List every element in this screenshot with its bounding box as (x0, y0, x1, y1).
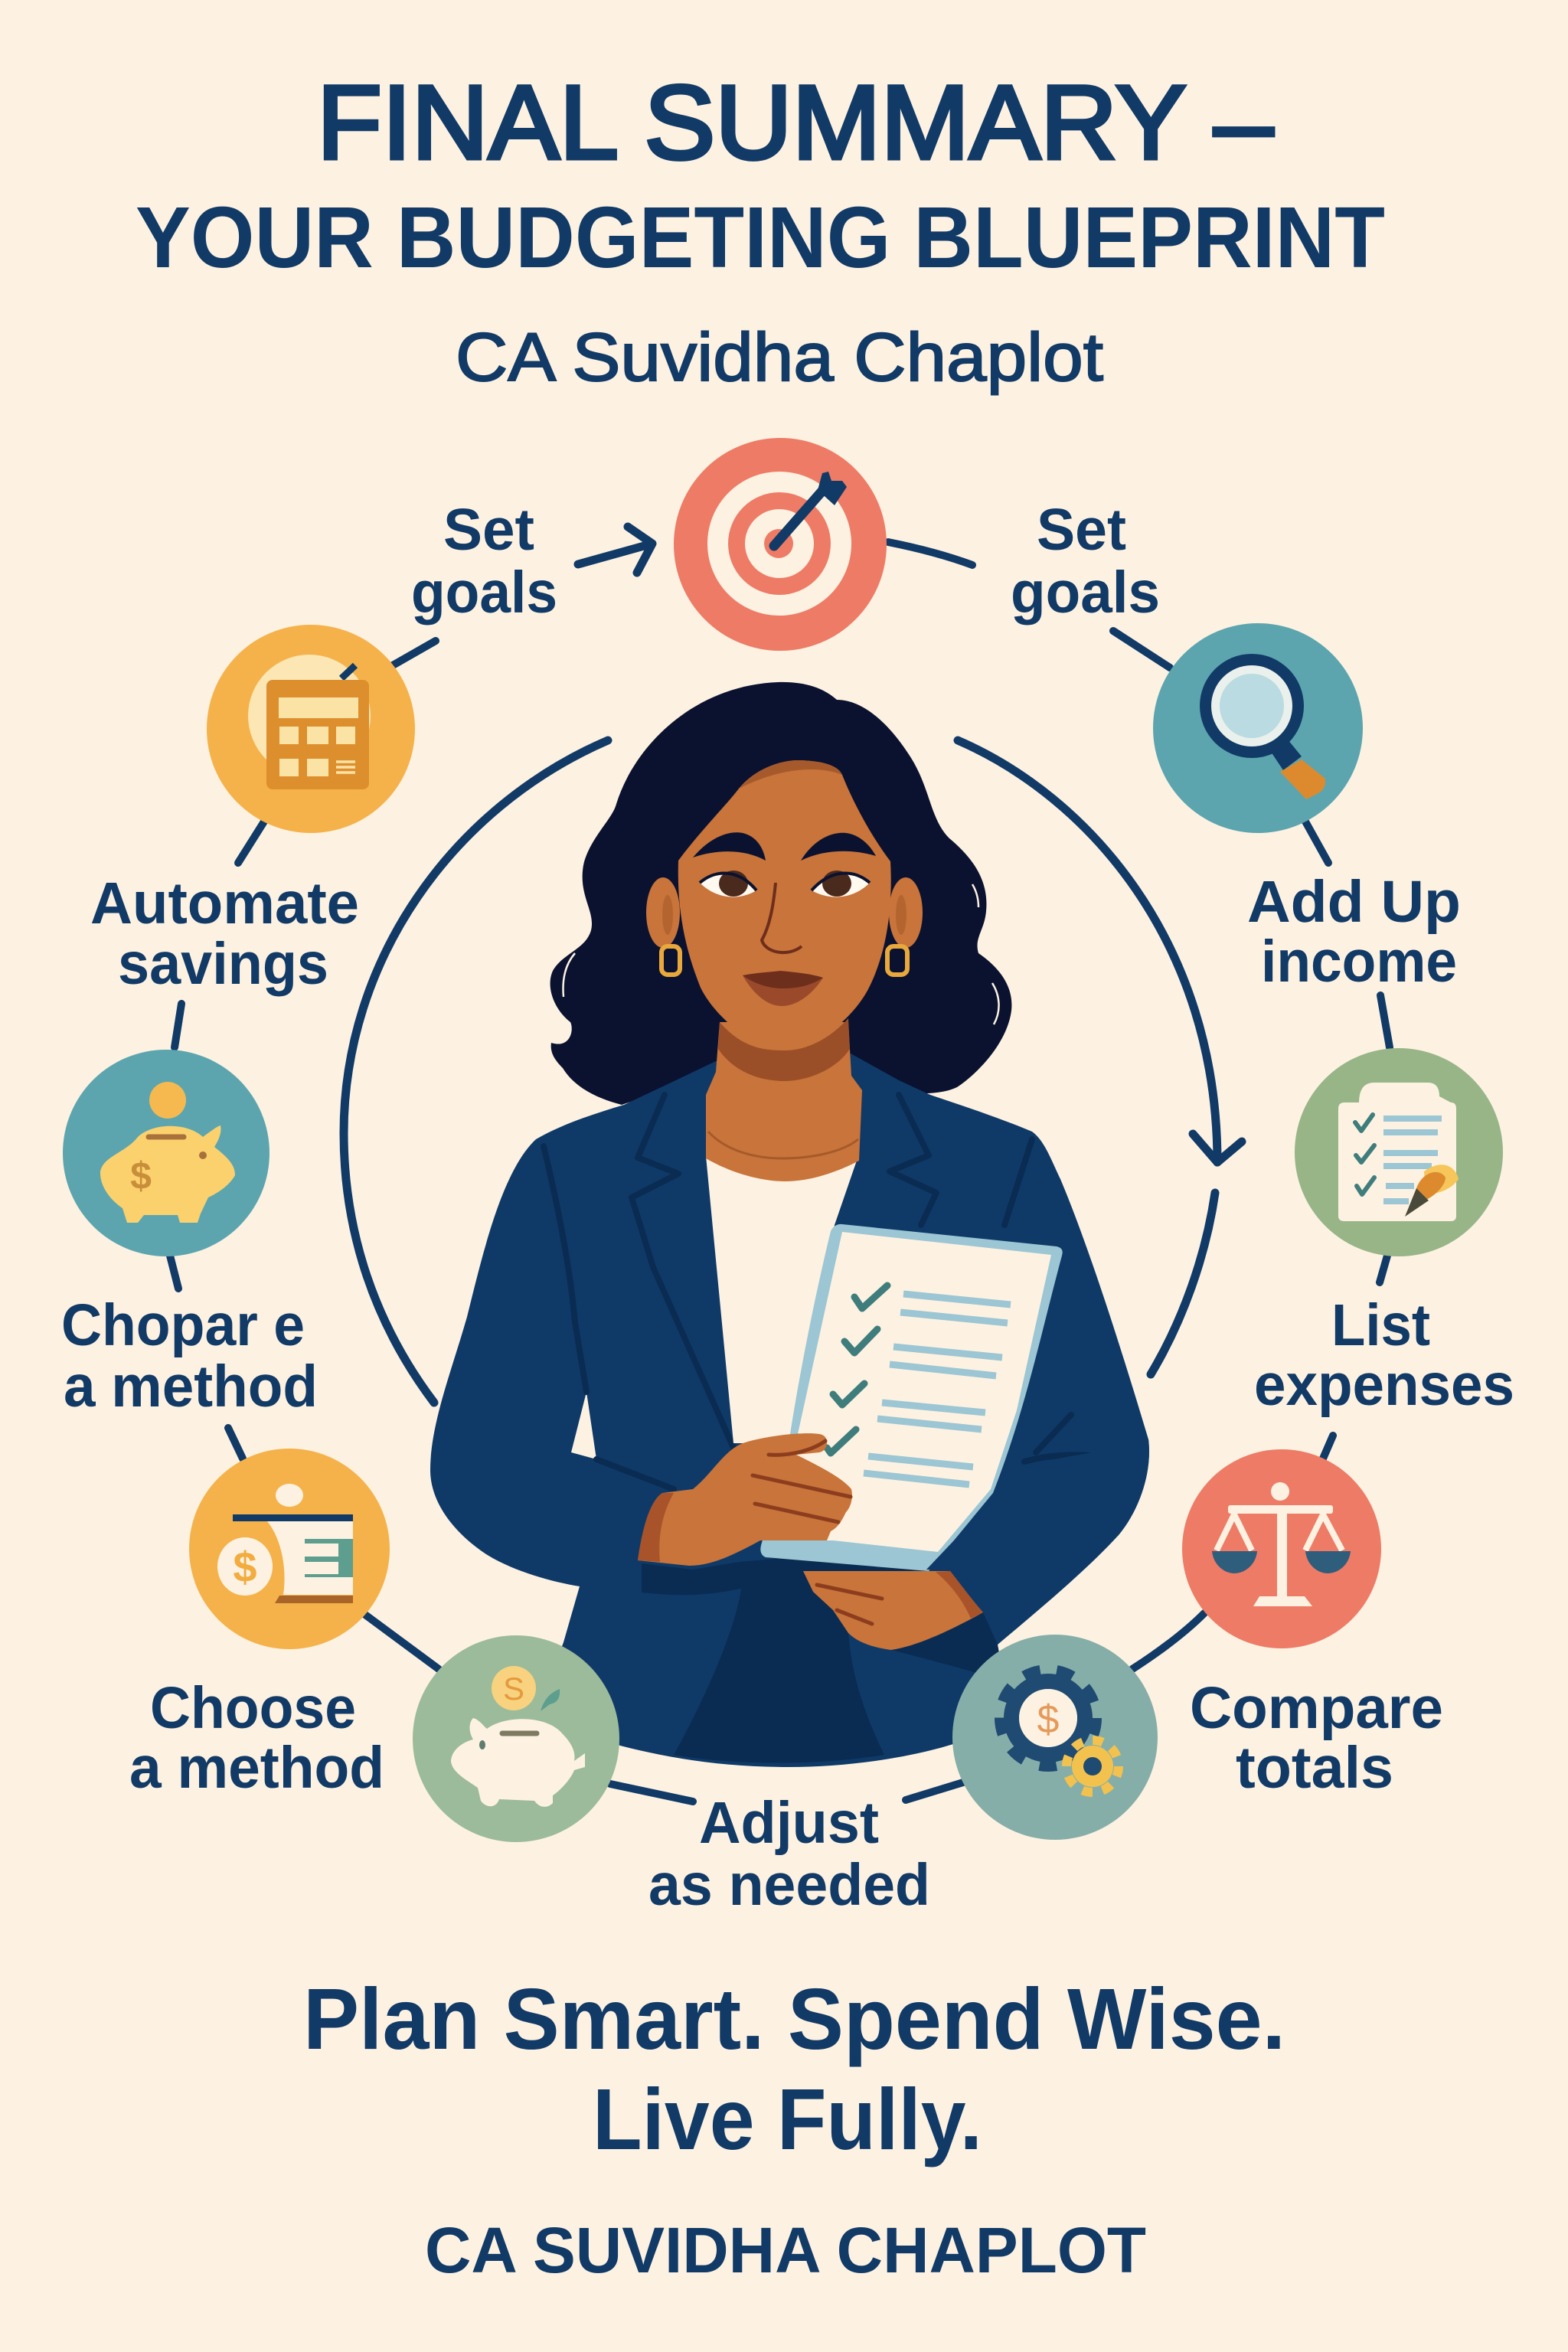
tagline (303, 1971, 1285, 2167)
jacket lapels and seams (544, 1095, 1099, 1489)
arrow into target (578, 527, 652, 573)
label: compare totals: totals (1236, 1735, 1393, 1801)
label: chopare a method (61, 1292, 318, 1419)
icon: piggy bank teal: $ (130, 1155, 152, 1197)
icon: method with coin and notes (189, 1449, 390, 1649)
title: YOUR BUDGETING BLUEPRINT (136, 189, 1385, 286)
icon: checklist (1295, 1048, 1503, 1256)
title: FINAL SUMMARY – (317, 64, 1274, 181)
person illustration (430, 682, 1149, 1767)
lips (743, 975, 823, 1006)
label: set goals right (1011, 497, 1160, 626)
label: chopare a method: a method (64, 1354, 318, 1419)
icon: target (674, 438, 887, 651)
hair (550, 682, 1011, 1105)
central cycle arcs with arrow (344, 740, 1242, 1403)
label: add up income (1247, 869, 1461, 995)
face (678, 760, 891, 1050)
ears (646, 877, 680, 948)
connector lines between steps (170, 542, 1390, 1802)
eyebrows (693, 832, 766, 861)
label: automate savings (90, 871, 359, 997)
label: set goals right: goals (1011, 560, 1160, 626)
label: chopare a method: Chopar e (61, 1292, 305, 1358)
label: adjust as needed: as needed (648, 1852, 930, 1918)
label: adjust as needed (648, 1790, 930, 1918)
tagline: Plan Smart. Spend Wise. (303, 1971, 1285, 2067)
icon: method with coin and notes: $ (233, 1543, 257, 1591)
upper hand (638, 1433, 852, 1566)
document (760, 1224, 1063, 1571)
neck (706, 1022, 862, 1181)
earrings (662, 946, 680, 975)
label: adjust as needed: Adjust (699, 1790, 879, 1856)
label: choose a method: a method (129, 1735, 384, 1801)
right forearm (926, 1439, 1149, 1645)
label: compare totals: Compare (1190, 1675, 1443, 1741)
white shirt (706, 1156, 858, 1443)
icon: scales (1182, 1449, 1381, 1648)
label: list expenses: List (1331, 1292, 1430, 1358)
icon: calculator (207, 625, 415, 833)
label: set goals left: goals (411, 560, 557, 626)
tagline: Live Fully. (593, 2071, 982, 2167)
icon: magnifier (1153, 623, 1363, 833)
label: choose a method: Choose (150, 1675, 356, 1741)
nose (762, 883, 802, 952)
icon: piggy bank green (413, 1635, 619, 1842)
title (136, 64, 1385, 286)
label: automate savings: savings (118, 931, 328, 997)
label: compare totals (1190, 1675, 1443, 1801)
icon: piggy bank green: S (503, 1671, 524, 1707)
author subtitle: CA Suvidha Chaplot (456, 318, 1103, 395)
icon: gears: $ (1037, 1697, 1060, 1742)
label: list expenses (1254, 1292, 1514, 1418)
inner dark shirt and sleeve shadow (642, 1554, 930, 1762)
label: automate savings: Automate (90, 871, 359, 936)
sleeve shadow under lower hand (891, 1612, 1004, 1681)
label: add up income: income (1261, 929, 1457, 995)
label: choose a method (129, 1675, 384, 1801)
icon: gears (952, 1635, 1158, 1840)
label: list expenses: expenses (1254, 1352, 1514, 1418)
lower hand (803, 1571, 983, 1650)
eyes (700, 874, 756, 897)
label: add up income: Add Up (1247, 869, 1461, 935)
icon: piggy bank teal (63, 1050, 270, 1256)
label: set goals left: Set (443, 497, 534, 563)
label: set goals left (411, 497, 557, 626)
label: set goals right: Set (1037, 497, 1126, 563)
footer author name: CA SUVIDHA CHAPLOT (425, 2214, 1146, 2286)
arm gap (571, 1392, 596, 1459)
jacket (430, 1054, 1149, 1767)
